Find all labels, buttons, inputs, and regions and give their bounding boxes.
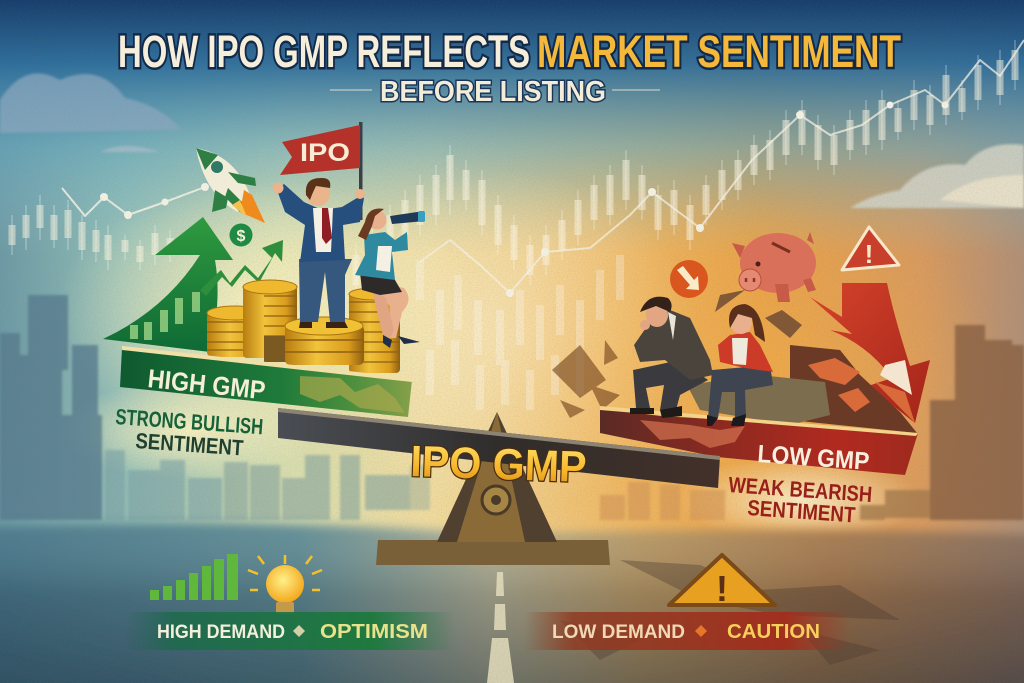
- rubble debris: [552, 290, 917, 433]
- seesaw: [278, 408, 720, 565]
- icon: rocket: [196, 148, 265, 223]
- coin stack tall: [243, 280, 297, 362]
- coin stack right: [349, 288, 400, 373]
- clouds: [0, 73, 1024, 208]
- panel: demand summary right: [525, 555, 850, 650]
- rock seat: [687, 375, 830, 425]
- icon: down arrow circle: [670, 260, 708, 298]
- panel: bearish side: [552, 227, 930, 528]
- candlestick charts: [12, 40, 1015, 410]
- text: low demand: LOW DEMAND: [552, 622, 685, 643]
- IPO GMP label: IPO GMP: [410, 437, 587, 492]
- text: strong bullish sentiment: STRONG BULLISH: [115, 404, 264, 439]
- panel: bullish side: [103, 122, 425, 461]
- icon: red down arrow: [810, 283, 930, 423]
- subtitle: before listing: BEFORE LISTING: [380, 76, 606, 108]
- text: strong bullish sentiment: SENTIMENT: [135, 428, 245, 461]
- text: strong bullish sentiment: [115, 404, 264, 461]
- title line: how IPO GMP reflects market sentiment: MARKET SENTIMENT: [537, 26, 901, 77]
- seesaw base: [376, 540, 610, 565]
- title line: how IPO GMP reflects market sentiment: HOW IPO GMP REFLECTS: [118, 26, 530, 77]
- text: caution: CAUTION: [727, 621, 820, 643]
- figure: worried businessman: [630, 297, 713, 418]
- city skyline right: [600, 325, 1024, 520]
- banner: high GMP: [120, 346, 412, 417]
- platform banner: low GMP: [600, 406, 918, 476]
- icon: dollar coin: $: [237, 228, 246, 245]
- band: [125, 612, 455, 650]
- coin stack under man: [285, 317, 364, 365]
- text: optimism: OPTIMISM: [320, 621, 428, 643]
- text: weak bearish sentiment: WEAK BEARISH: [728, 472, 873, 507]
- figure: worried woman: [707, 304, 773, 426]
- icon: large green up arrow: [103, 217, 233, 352]
- text: weak bearish sentiment: SENTIMENT: [747, 495, 857, 528]
- band: [525, 612, 850, 650]
- diamond: [293, 625, 305, 637]
- icon: zigzag growth arrow: [200, 240, 283, 296]
- coin stack far left: [207, 306, 264, 357]
- road: [0, 523, 1024, 683]
- figure: cheering businessman: [272, 178, 365, 328]
- figure: woman with telescope: [355, 209, 425, 348]
- flag with IPO: IPO: [300, 139, 350, 167]
- title: [118, 26, 901, 108]
- panel: demand summary left: [125, 554, 455, 650]
- icon: warning triangle: !: [716, 568, 728, 609]
- city skyline left: [0, 295, 430, 520]
- text: weak bearish sentiment: [728, 472, 873, 528]
- icon: light bulb: [248, 555, 322, 614]
- flag with IPO: [280, 122, 362, 220]
- seesaw fulcrum: [437, 412, 557, 542]
- icon: piggy bank: [732, 232, 816, 302]
- icon: dollar coin: [230, 224, 252, 246]
- platform banner: low GMP: LOW GMP: [757, 440, 870, 476]
- seesaw beam: [278, 408, 720, 488]
- icon: warning triangle: [669, 555, 775, 609]
- icon: rising bars: [150, 554, 238, 600]
- text: high demand: HIGH DEMAND: [157, 622, 285, 643]
- banner: high GMP: HIGH GMP: [146, 363, 267, 405]
- chart: small green candles: [130, 292, 200, 340]
- diamond: [695, 625, 707, 637]
- trend lines: [62, 40, 1024, 297]
- icon: warning triangle: [842, 227, 899, 270]
- icon: warning triangle: !: [865, 239, 873, 269]
